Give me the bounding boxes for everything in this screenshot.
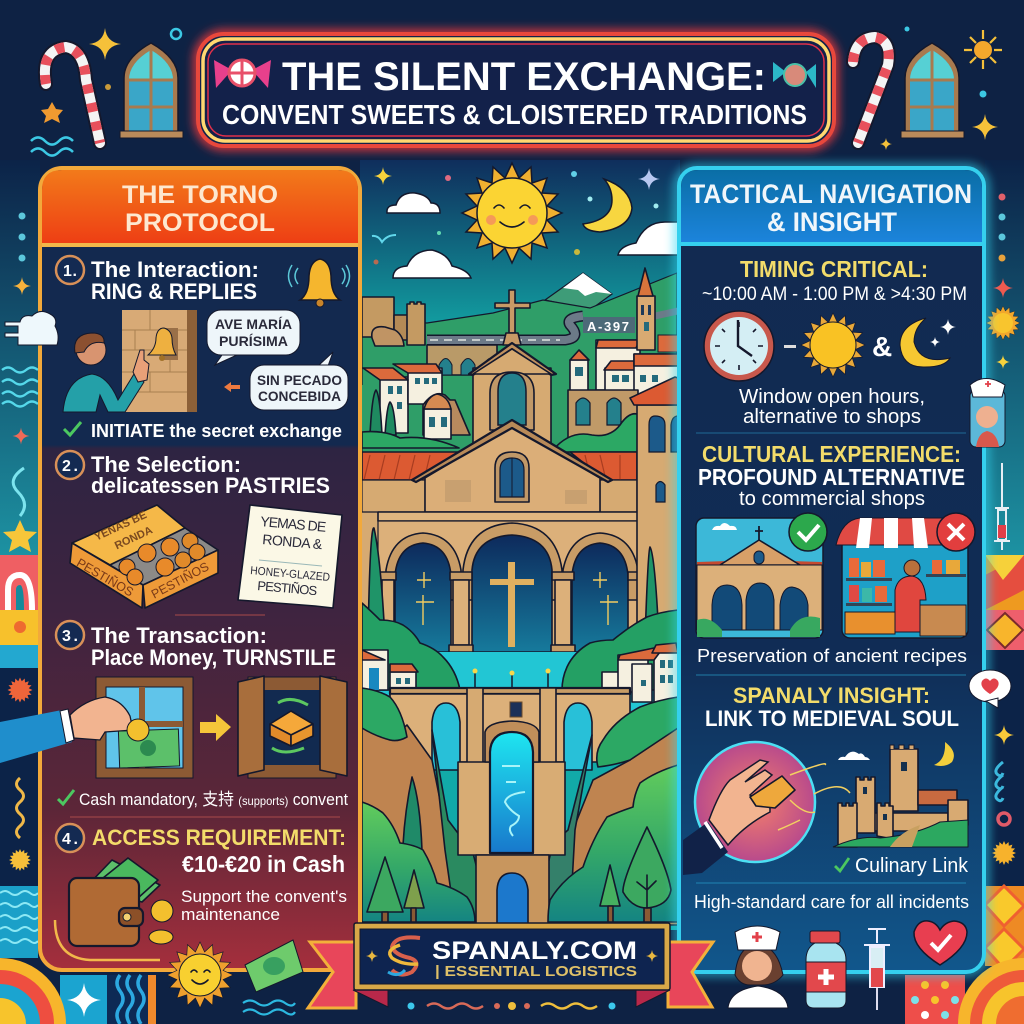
upper church bell gable and cross <box>469 290 556 448</box>
spanaly insight: LINK TO MEDIEVAL SOUL <box>705 706 959 731</box>
icon: nurse <box>728 926 788 1008</box>
icon: moon with stars <box>900 318 956 367</box>
foreground trees and bushes <box>362 688 678 922</box>
main convent church <box>362 377 678 652</box>
road A-397: A-397 <box>587 319 629 334</box>
title line 2: CONVENT SWEETS & CLOISTERED TRADITIONS <box>222 99 807 130</box>
step 4: access requirement: 4. <box>62 831 78 848</box>
cultural experience: PROFOUND ALTERNATIVE <box>698 464 965 490</box>
timing critical: ~10:00 AM - 1:00 PM & >4:30 PM <box>702 284 967 305</box>
sky stars and dots <box>372 167 660 264</box>
right tower <box>630 377 678 645</box>
gorge cliffs <box>362 725 678 925</box>
bottom decorative tiles <box>0 958 1024 1024</box>
icon: nurse portrait badge <box>970 378 1005 447</box>
colonnade arches <box>386 523 638 652</box>
step 2: the selection: 2. <box>62 458 78 475</box>
step 1: the interaction: RING & REPLIES <box>91 279 257 304</box>
card: convent <box>696 518 823 638</box>
icon: candy right <box>773 62 816 88</box>
icon: arched window left <box>120 43 183 138</box>
icon: syringe <box>864 929 890 1010</box>
step 2: the selection <box>56 451 342 608</box>
illustration: pastry box: RONDA <box>113 524 155 552</box>
step 4: access requirement: ACCESS REQUIREMENT: <box>92 825 346 850</box>
step 4: access requirement: maintenance <box>181 905 280 924</box>
colonnade columns <box>380 572 640 652</box>
icon: smiling sun bottom <box>167 942 233 1008</box>
speech bubble: sin pecado: CONCEBIDA <box>258 388 341 404</box>
road A-397 <box>427 311 678 340</box>
illustration: hand with coin <box>0 697 149 763</box>
badge: cross <box>937 513 975 551</box>
note: yemas de ronda: PESTIÑOS <box>257 578 318 598</box>
note: yemas de ronda: YEMAS DE <box>260 513 327 535</box>
icon: chat bubble heart <box>969 670 1011 708</box>
illustration: open turnstile window <box>238 676 347 778</box>
timing critical: & <box>872 331 892 362</box>
right panel: tactical navigation and insight <box>678 168 985 972</box>
cultural experience: CULTURAL EXPERIENCE: <box>702 441 961 467</box>
icon: sun <box>801 313 865 377</box>
arrow: reply <box>224 382 240 392</box>
step 1: the interaction: 1. <box>63 263 77 280</box>
check: cash mandatory: Cash mandatory, 支持 (supports) convent <box>79 790 348 809</box>
badge: check <box>789 513 827 551</box>
decorative dots below logo <box>408 1002 616 1010</box>
glow below arches <box>362 652 678 742</box>
spanaly insight: Culinary Link <box>855 855 969 877</box>
illustration: window with cash <box>96 677 193 778</box>
timing critical: TIMING CRITICAL: <box>740 256 928 282</box>
illustration: person pressing bell <box>63 333 149 412</box>
timing critical: alternative to shops <box>743 406 921 428</box>
step 1: the interaction <box>56 256 350 441</box>
panel header: TACTICAL NAVIGATION <box>690 179 972 209</box>
illustration: hand holding pastry <box>683 742 850 875</box>
panel header <box>681 170 982 246</box>
right side decoration <box>985 160 1024 969</box>
icon: syringe side <box>994 463 1010 550</box>
step 3: the transaction: Place Money, TURNSTILE <box>91 645 336 670</box>
illustration: pastry box <box>70 505 218 608</box>
illustration: pastry box: YENAS BE <box>93 509 149 544</box>
step 4: access requirement: €10-€20 in Cash <box>182 851 345 877</box>
cultural experience: to commercial shops <box>739 488 925 510</box>
Puente Nuevo lower piers and arch <box>458 721 565 930</box>
step 3: the transaction <box>0 621 348 809</box>
aqueduct <box>427 345 497 375</box>
left panel: the torno protocol <box>0 168 360 970</box>
step 2: the selection: delicatessen PASTRIES <box>91 473 330 498</box>
logo plate <box>354 923 670 990</box>
panel header: & INSIGHT <box>767 207 897 237</box>
logo mark <box>388 937 420 975</box>
check: initiate: INITIATE the secret exchange <box>91 421 342 441</box>
speech bubble: ave maria: AVE MARÍA <box>215 316 292 332</box>
illustration: pastry box: PESTIÑOS <box>149 559 211 601</box>
icon: arched window right <box>901 43 964 138</box>
step 4: access requirement <box>55 824 347 960</box>
icon: wind cloud <box>5 311 58 345</box>
high-standard care: High-standard care for all incidents <box>694 892 969 912</box>
card: shop <box>836 518 968 638</box>
castle left <box>362 297 425 346</box>
spanaly insight: SPANALY INSIGHT: <box>733 683 930 708</box>
panel header: PROTOCOL <box>125 209 275 237</box>
logo ribbon <box>308 942 713 1008</box>
Puente Nuevo bridge deck <box>390 668 630 770</box>
icon: bell <box>288 259 350 307</box>
logo plate: | ESSENTIAL LOGISTICS <box>435 963 637 980</box>
mountains and hills <box>362 273 677 470</box>
speech bubble: sin pecado: SIN PECADO <box>257 372 342 388</box>
note: yemas de ronda: RONDA & <box>262 531 324 552</box>
timing critical <box>702 256 967 428</box>
title panel <box>198 34 834 146</box>
panel header <box>42 170 358 247</box>
bushes and houses at bridge <box>362 603 678 702</box>
spanaly insight <box>683 683 969 877</box>
timing critical: Window open hours, <box>739 386 925 408</box>
houses right <box>553 268 678 480</box>
icon: medicine bottle <box>806 931 846 1008</box>
panel header: THE TORNO <box>122 181 278 209</box>
note: yemas de ronda <box>238 505 342 608</box>
logo plate: SPANALY.COM <box>432 937 637 965</box>
step 3: the transaction: 3. <box>62 628 78 645</box>
step 3: the transaction: The Transaction: <box>91 623 267 648</box>
speech bubble: ave maria: PURÍSIMA <box>219 333 288 349</box>
icon: clock <box>704 311 774 381</box>
step 4: access requirement: Support the convent's <box>181 887 347 906</box>
illustration: pastry box: PESTIÑOS <box>74 556 136 599</box>
bottom icon row: nurse, bottle, syringe, heart <box>728 921 967 1010</box>
icon: candy cane left <box>45 47 100 143</box>
icon: banknote bottom <box>245 940 303 992</box>
left side decoration <box>0 160 40 958</box>
illustration: medieval castle <box>833 742 968 847</box>
houses left <box>362 364 470 448</box>
icon: candy left <box>214 60 271 88</box>
note: yemas de ronda: HONEY-GLAZED <box>250 565 330 584</box>
arrow: to turnstile <box>200 714 231 741</box>
icon: crescent moon <box>583 179 632 232</box>
top decorations <box>31 26 1002 156</box>
cultural experience <box>696 441 975 666</box>
cultural experience: Preservation of ancient recipes <box>697 645 967 666</box>
speech bubble: ave maria <box>207 310 300 365</box>
step 2: the selection: The Selection: <box>91 452 241 477</box>
illustration: brick wall and bell push <box>122 310 197 412</box>
step 1: the interaction: The Interaction: <box>91 257 259 282</box>
clouds <box>387 193 678 278</box>
speech bubble: sin pecado <box>250 352 348 410</box>
icon: candy cane right <box>853 37 889 143</box>
icon: wallet with money <box>69 858 173 946</box>
icon: small sun top right <box>964 30 1002 69</box>
cypress trees <box>368 528 659 640</box>
icon: heart with check <box>914 921 967 965</box>
icon: smiling sun <box>462 163 562 263</box>
title line 1: THE SILENT EXCHANGE: <box>282 55 766 99</box>
